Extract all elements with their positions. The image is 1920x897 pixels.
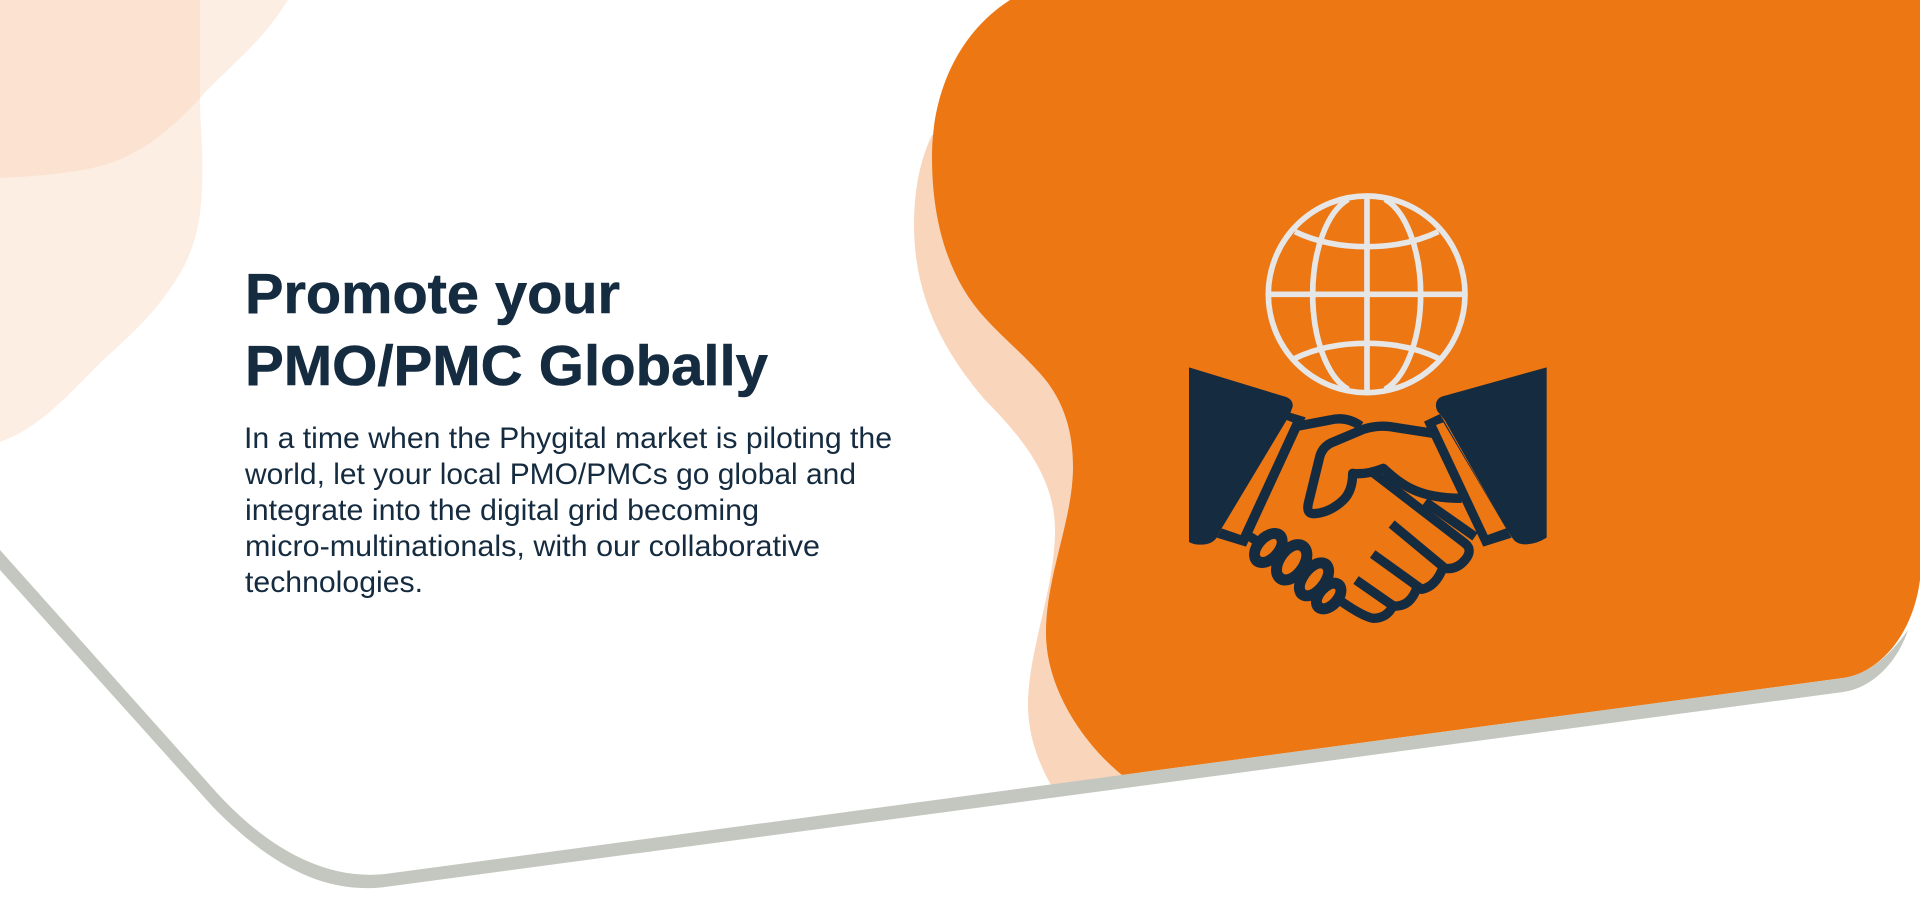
body text: micro-multinationals, with our collaborative	[245, 530, 820, 563]
body text	[244, 422, 892, 599]
decorative blobs: top left	[0, 0, 288, 442]
heading: PMO/PMC Globally	[245, 334, 768, 398]
icon: globe	[1268, 196, 1465, 393]
card shadow edge	[0, 550, 1908, 888]
body text: In a time when the Phygital market is piloting the	[244, 422, 892, 455]
body text: world, let your local PMO/PMCs go global and	[244, 458, 856, 491]
icon: left sleeve	[1189, 367, 1306, 547]
body text: integrate into the digital grid becoming	[245, 494, 759, 527]
heading: Promote your	[245, 262, 620, 326]
shadow blob behind orange panel	[914, 135, 1140, 785]
orange panel	[932, 0, 1920, 775]
icon: globe and handshake	[1189, 196, 1547, 621]
icon: knuckles	[1241, 520, 1354, 621]
heading	[245, 262, 768, 398]
body text: technologies.	[245, 566, 423, 599]
icon: clasped hands	[1250, 419, 1475, 618]
icon: right sleeve	[1424, 367, 1547, 547]
